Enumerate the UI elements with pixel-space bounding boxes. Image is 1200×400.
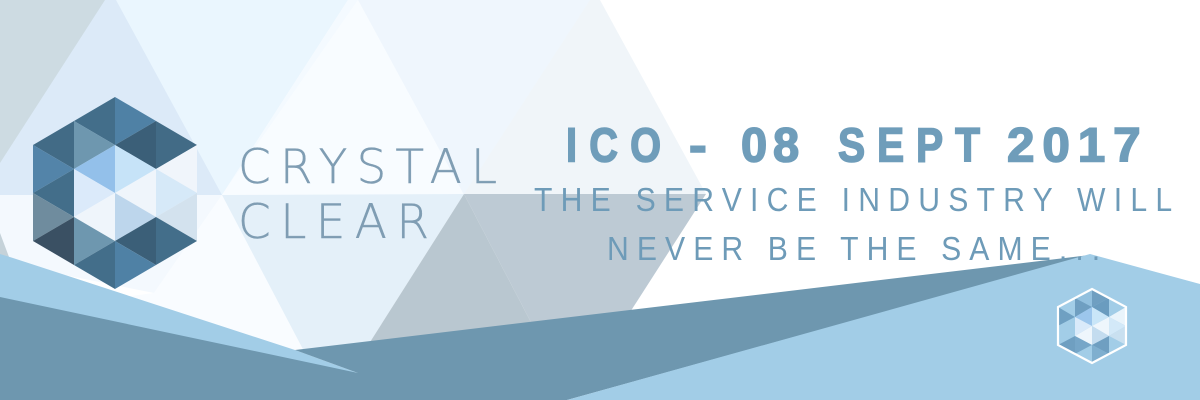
headline: ico date: 2017 [1007, 119, 1141, 172]
headline: ico date: ICO [566, 119, 661, 172]
wordmark: crystal clear: CRYSTAL [238, 140, 497, 195]
wordmark: crystal clear: CLEAR [238, 195, 429, 250]
headline: ico date [566, 118, 1141, 172]
bottom dark blue shape [0, 255, 1090, 400]
tagline: NEVER BE THE SAME... [607, 230, 1100, 267]
tagline [534, 181, 1172, 267]
logo: crystal hexagon [33, 97, 197, 289]
bottom light blue shape right [567, 254, 1200, 400]
small logo: crystal hexagon badge [1058, 289, 1126, 363]
wordmark: crystal clear [238, 140, 497, 250]
tagline: THE SERVICE INDUSTRY WILL [534, 181, 1172, 218]
bottom light blue shape left [0, 254, 358, 373]
headline: ico date: - [689, 118, 707, 172]
headline: ico date: SEPT [838, 118, 980, 172]
headline: ico date: 08 [741, 119, 799, 172]
